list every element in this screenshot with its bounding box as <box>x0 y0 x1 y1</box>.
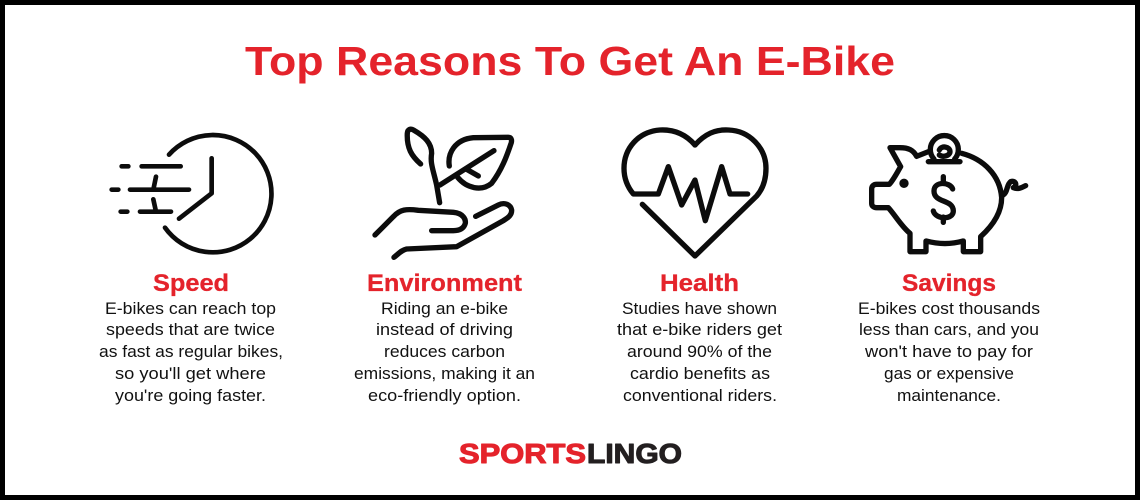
text block: environment: eco-friendly option. <box>368 387 521 405</box>
text block: environment <box>354 300 535 405</box>
text block: health: cardio benefits as <box>630 365 770 383</box>
text block: savings: gas or expensive <box>884 365 1014 383</box>
icon: heart with pulse <box>624 130 766 256</box>
text block: savings: maintenance. <box>897 387 1001 405</box>
heading: savings: Savings <box>902 270 996 297</box>
title: Top Reasons To Get An E-Bike <box>245 38 895 84</box>
text block: savings: E-bikes cost thousands <box>858 300 1040 318</box>
text block: environment: reduces carbon <box>384 343 505 361</box>
text block: health: that e-bike riders get <box>617 321 782 339</box>
text block: environment: emissions, making it an <box>354 365 535 383</box>
text block: health: Studies have shown <box>622 300 777 318</box>
icon: clock speed <box>112 135 271 252</box>
text block: speed: so you'll get where <box>115 365 266 383</box>
logo: SportsLingo: SPORTS <box>459 438 586 469</box>
text block: health: around 90% of the <box>627 343 772 361</box>
logo: SportsLingo <box>459 438 682 469</box>
icon: plant in hand <box>375 129 512 257</box>
text block: speed: E-bikes can reach top <box>105 300 276 318</box>
text block: savings: won't have to pay for <box>864 343 1034 361</box>
text block: savings <box>858 300 1040 405</box>
panel: savings <box>858 270 1040 405</box>
text block: health: conventional riders. <box>623 387 777 405</box>
text block: speed: speeds that are twice <box>106 321 275 339</box>
heading: health: Health <box>660 270 739 297</box>
text block: speed <box>99 300 283 405</box>
heading: speed: Speed <box>153 270 229 297</box>
heading: environment: Environment <box>367 270 522 297</box>
panel: health <box>617 270 782 405</box>
text block: environment: instead of driving <box>376 321 513 339</box>
panel: environment <box>354 270 535 405</box>
text block: speed: you're going faster. <box>115 387 266 405</box>
text block: savings: less than cars, and you <box>859 321 1039 339</box>
panel: speed <box>99 270 283 405</box>
icon: piggy bank <box>872 136 1026 252</box>
text block: environment: Riding an e-bike <box>381 300 508 318</box>
text block: health <box>617 300 782 405</box>
logo: SportsLingo: LINGO <box>587 438 682 469</box>
text block: speed: as fast as regular bikes, <box>99 343 283 361</box>
